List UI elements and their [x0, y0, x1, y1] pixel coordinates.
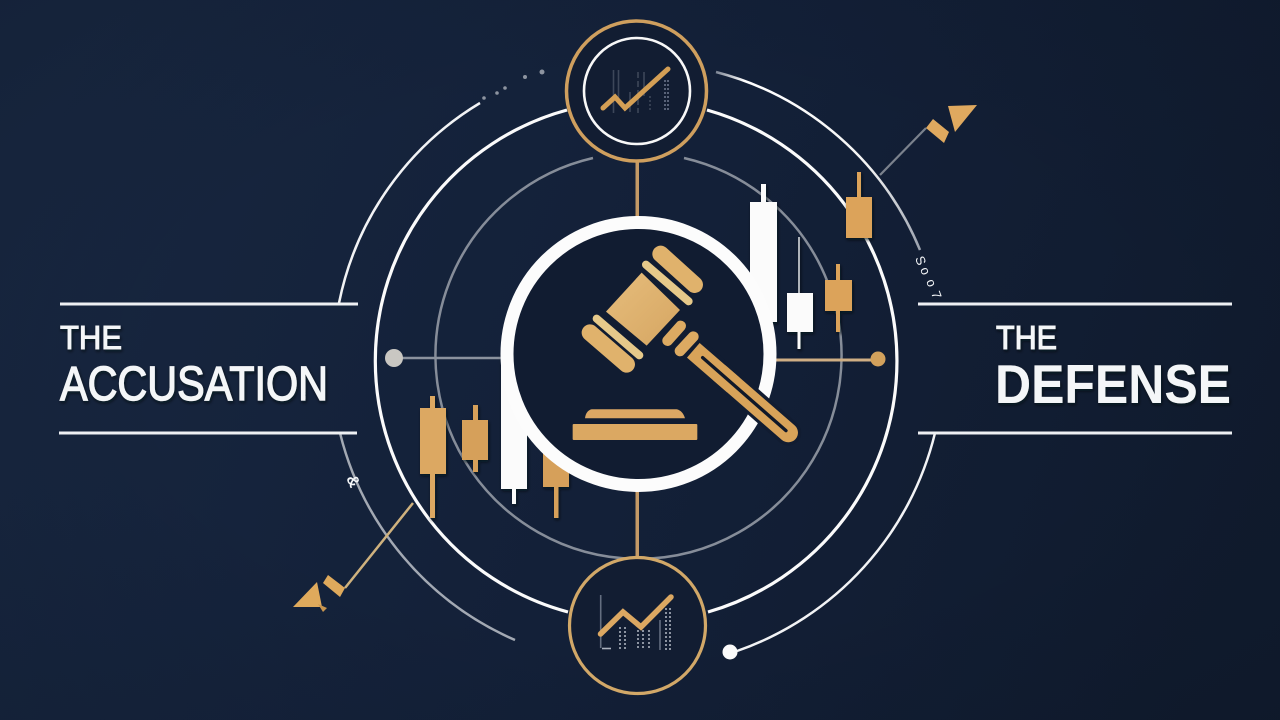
heading: the accusation — [60, 320, 328, 411]
gold candle upper — [846, 172, 872, 238]
inner gray circle — [435, 158, 841, 559]
white candle left — [501, 350, 527, 504]
main circle: right arc — [707, 110, 897, 612]
gold candle tall — [420, 396, 446, 518]
dots: top left trail — [482, 70, 544, 100]
gavel sound block — [573, 409, 697, 440]
small glyphs: right arc — [912, 254, 945, 301]
connector: top — [636, 160, 639, 218]
white candle tall — [750, 184, 777, 322]
white candle short — [787, 237, 813, 349]
heading: the accusation: THE — [60, 320, 122, 357]
small glyph: left arc: & — [342, 473, 363, 491]
heading: the defense — [995, 320, 1231, 415]
heading: the accusation: ACCUSATION — [60, 358, 328, 411]
gavel handle — [693, 350, 788, 433]
connector: bottom — [636, 490, 639, 558]
gold candle low — [543, 450, 569, 518]
arrow: top right — [880, 105, 977, 175]
gold candle mid — [462, 405, 488, 472]
bottom medallion — [570, 558, 706, 694]
dotted bars — [601, 595, 670, 650]
outer arc: lower right — [737, 433, 935, 651]
small glyphs: right arc: 7 — [928, 289, 945, 301]
arrow: bottom left — [293, 503, 413, 612]
top medallion — [566, 21, 706, 161]
central ring — [507, 222, 770, 486]
white dot: lower right arc end — [722, 644, 738, 660]
left heading block — [59, 304, 358, 433]
main circle: left arc — [375, 110, 568, 612]
small glyphs: right arc: o — [917, 265, 934, 277]
gold candle lower — [825, 264, 852, 332]
node line: right — [776, 352, 886, 366]
right heading block — [918, 304, 1232, 433]
outer arc: lower left — [340, 433, 515, 640]
faint bars — [614, 70, 668, 113]
candlesticks: right side — [750, 172, 872, 349]
trend line — [603, 69, 668, 108]
heading: the defense: THE — [996, 320, 1057, 357]
outer arc: top right — [716, 72, 920, 250]
small glyphs: right arc: S — [912, 254, 929, 267]
gavel icon — [573, 254, 788, 440]
gavel lower bands — [590, 319, 639, 364]
gavel collars — [668, 326, 693, 351]
node line: left — [385, 349, 502, 367]
heading: the defense: DEFENSE — [995, 353, 1231, 415]
small glyphs: right arc: o — [923, 277, 940, 289]
candlesticks: left side — [420, 350, 569, 518]
gavel head — [606, 273, 680, 346]
outer arc: top left — [339, 103, 480, 303]
trend line — [600, 597, 671, 634]
gavel upper bands — [646, 254, 695, 301]
